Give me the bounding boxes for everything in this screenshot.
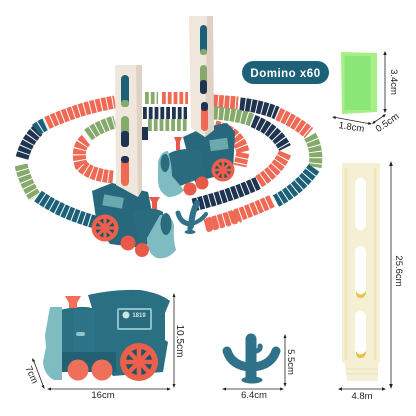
front train body [92, 183, 176, 258]
dimension: 4.8m [338, 387, 386, 402]
badge: Domino x60: Domino x60 [250, 68, 321, 80]
dimension: 10.5cm: 10.5cm [174, 325, 185, 357]
dimension: 25.6cm [389, 161, 404, 389]
large cactus obstacle with dimensions [222, 334, 296, 401]
domino track rings [21, 98, 316, 225]
dimension: 25.6cm: 25.6cm [393, 255, 404, 287]
dimension: 7cm [22, 358, 44, 389]
large cactus [227, 339, 276, 384]
dimension: 5.5cm: 5.5cm [285, 349, 296, 375]
dimension: 16cm [47, 388, 171, 401]
front orange dominoes over cactus side [206, 216, 240, 226]
cream tower [342, 163, 380, 381]
green domino piece with dimensions [332, 51, 401, 135]
rear train body [158, 123, 235, 197]
green domino [341, 52, 377, 114]
badge: Domino x60 [242, 61, 329, 84]
dimension: 6.4cm: 6.4cm [241, 390, 267, 401]
large train with dimensions [22, 290, 185, 401]
dimension: 4.8m: 4.8m [351, 391, 373, 402]
outer ring dominoes [21, 98, 316, 225]
rear tower [189, 16, 214, 137]
front train with tower [92, 65, 176, 258]
dimension: 0.5cm: 0.5cm [374, 111, 401, 135]
dimension: 3.4cm: 3.4cm [388, 69, 399, 95]
front tower [115, 65, 142, 197]
small cactus obstacle [178, 203, 206, 234]
rear train with tower [158, 16, 235, 197]
large train [43, 290, 170, 381]
inner ring dominoes [145, 125, 243, 166]
dimension: 7cm: 7cm [22, 364, 40, 385]
middle ring dominoes [79, 113, 285, 205]
number plate: 1819 [132, 313, 146, 319]
large cream tower piece with dimensions [338, 161, 404, 402]
dimension: 10.5cm [172, 293, 185, 388]
dimension: 1.8cm: 1.8cm [338, 120, 365, 135]
dimension: 16cm: 16cm [91, 390, 115, 401]
